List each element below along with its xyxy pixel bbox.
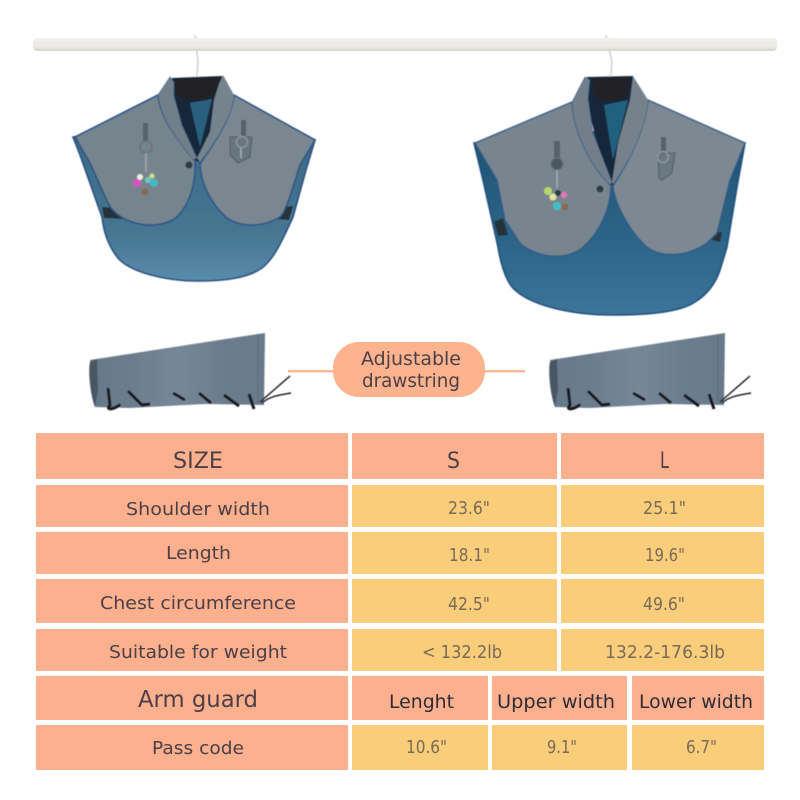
lining panel [474,130,745,315]
row: shoulder width: 25.1" [643,498,686,519]
left keyring with bells [133,123,158,196]
row: arm guard header: Lenght [389,691,454,713]
small cape on hanger [73,35,315,281]
right fleece lobe [613,100,745,254]
large cape on hanger [474,35,745,315]
row: arm guard header: Arm guard [138,687,258,713]
row: length [36,532,764,574]
header row: S [447,449,460,474]
row: pass code [36,725,764,770]
lining panel [73,120,315,281]
left keyring with bells [544,141,568,210]
row: pass code: 10.6" [406,737,447,758]
callout: adjustable drawstring: Adjustable [361,348,461,370]
row: pass code: 9.1" [547,737,577,758]
row: chest circumference: 42.5" [448,594,490,615]
row: chest circumference: 49.6" [643,594,685,615]
neck opening [170,76,224,162]
right keyring tab [230,120,252,163]
row: suitable for weight [36,629,764,671]
button [186,162,192,168]
row: chest circumference: Chest circumference [100,593,296,614]
row: pass code: Pass code [152,738,244,759]
row: suitable for weight: Suitable for weight [109,642,287,663]
row: pass code: 6.7" [686,737,717,758]
row: shoulder width: Shoulder width [126,499,270,520]
hanger pad [175,77,219,101]
row: arm guard header [36,676,764,720]
left fleece lobe [75,95,195,225]
callout: adjustable drawstring: drawstring [362,370,460,392]
right fleece lobe [200,95,315,225]
header row: SIZE [173,449,223,474]
hanger hook [178,35,212,96]
row: chest circumference [36,579,764,623]
callout: adjustable drawstring [288,342,525,397]
left lapel [158,77,197,160]
right arm guard [549,333,751,409]
row: shoulder width: 23.6" [448,498,490,519]
row: arm guard header: Lower width [639,691,753,713]
row: shoulder width [36,485,764,527]
button [596,186,604,192]
hanger pad [593,77,630,101]
header row [36,433,764,479]
row: suitable for weight: < 132.2lb [422,642,502,663]
right lapel [612,76,648,184]
left arm guard [89,333,291,409]
row: arm guard header: Upper width [497,691,615,713]
inner lining [604,100,628,160]
right lapel [197,75,234,162]
hanging rod [33,38,777,51]
header row: L [660,449,670,474]
side shadows [494,218,722,242]
size table [36,433,764,770]
right keyring tab [658,137,675,180]
row: length: 18.1" [449,545,490,566]
inner lining [190,99,212,147]
neck opening [586,76,633,185]
row: length: Length [166,543,231,564]
side straps [102,206,293,220]
hanger hook [591,35,625,96]
left lapel [572,77,612,185]
row: suitable for weight: 132.2-176.3lb [605,642,725,663]
left fleece lobe [475,102,611,256]
row: length: 19.6" [645,545,685,566]
